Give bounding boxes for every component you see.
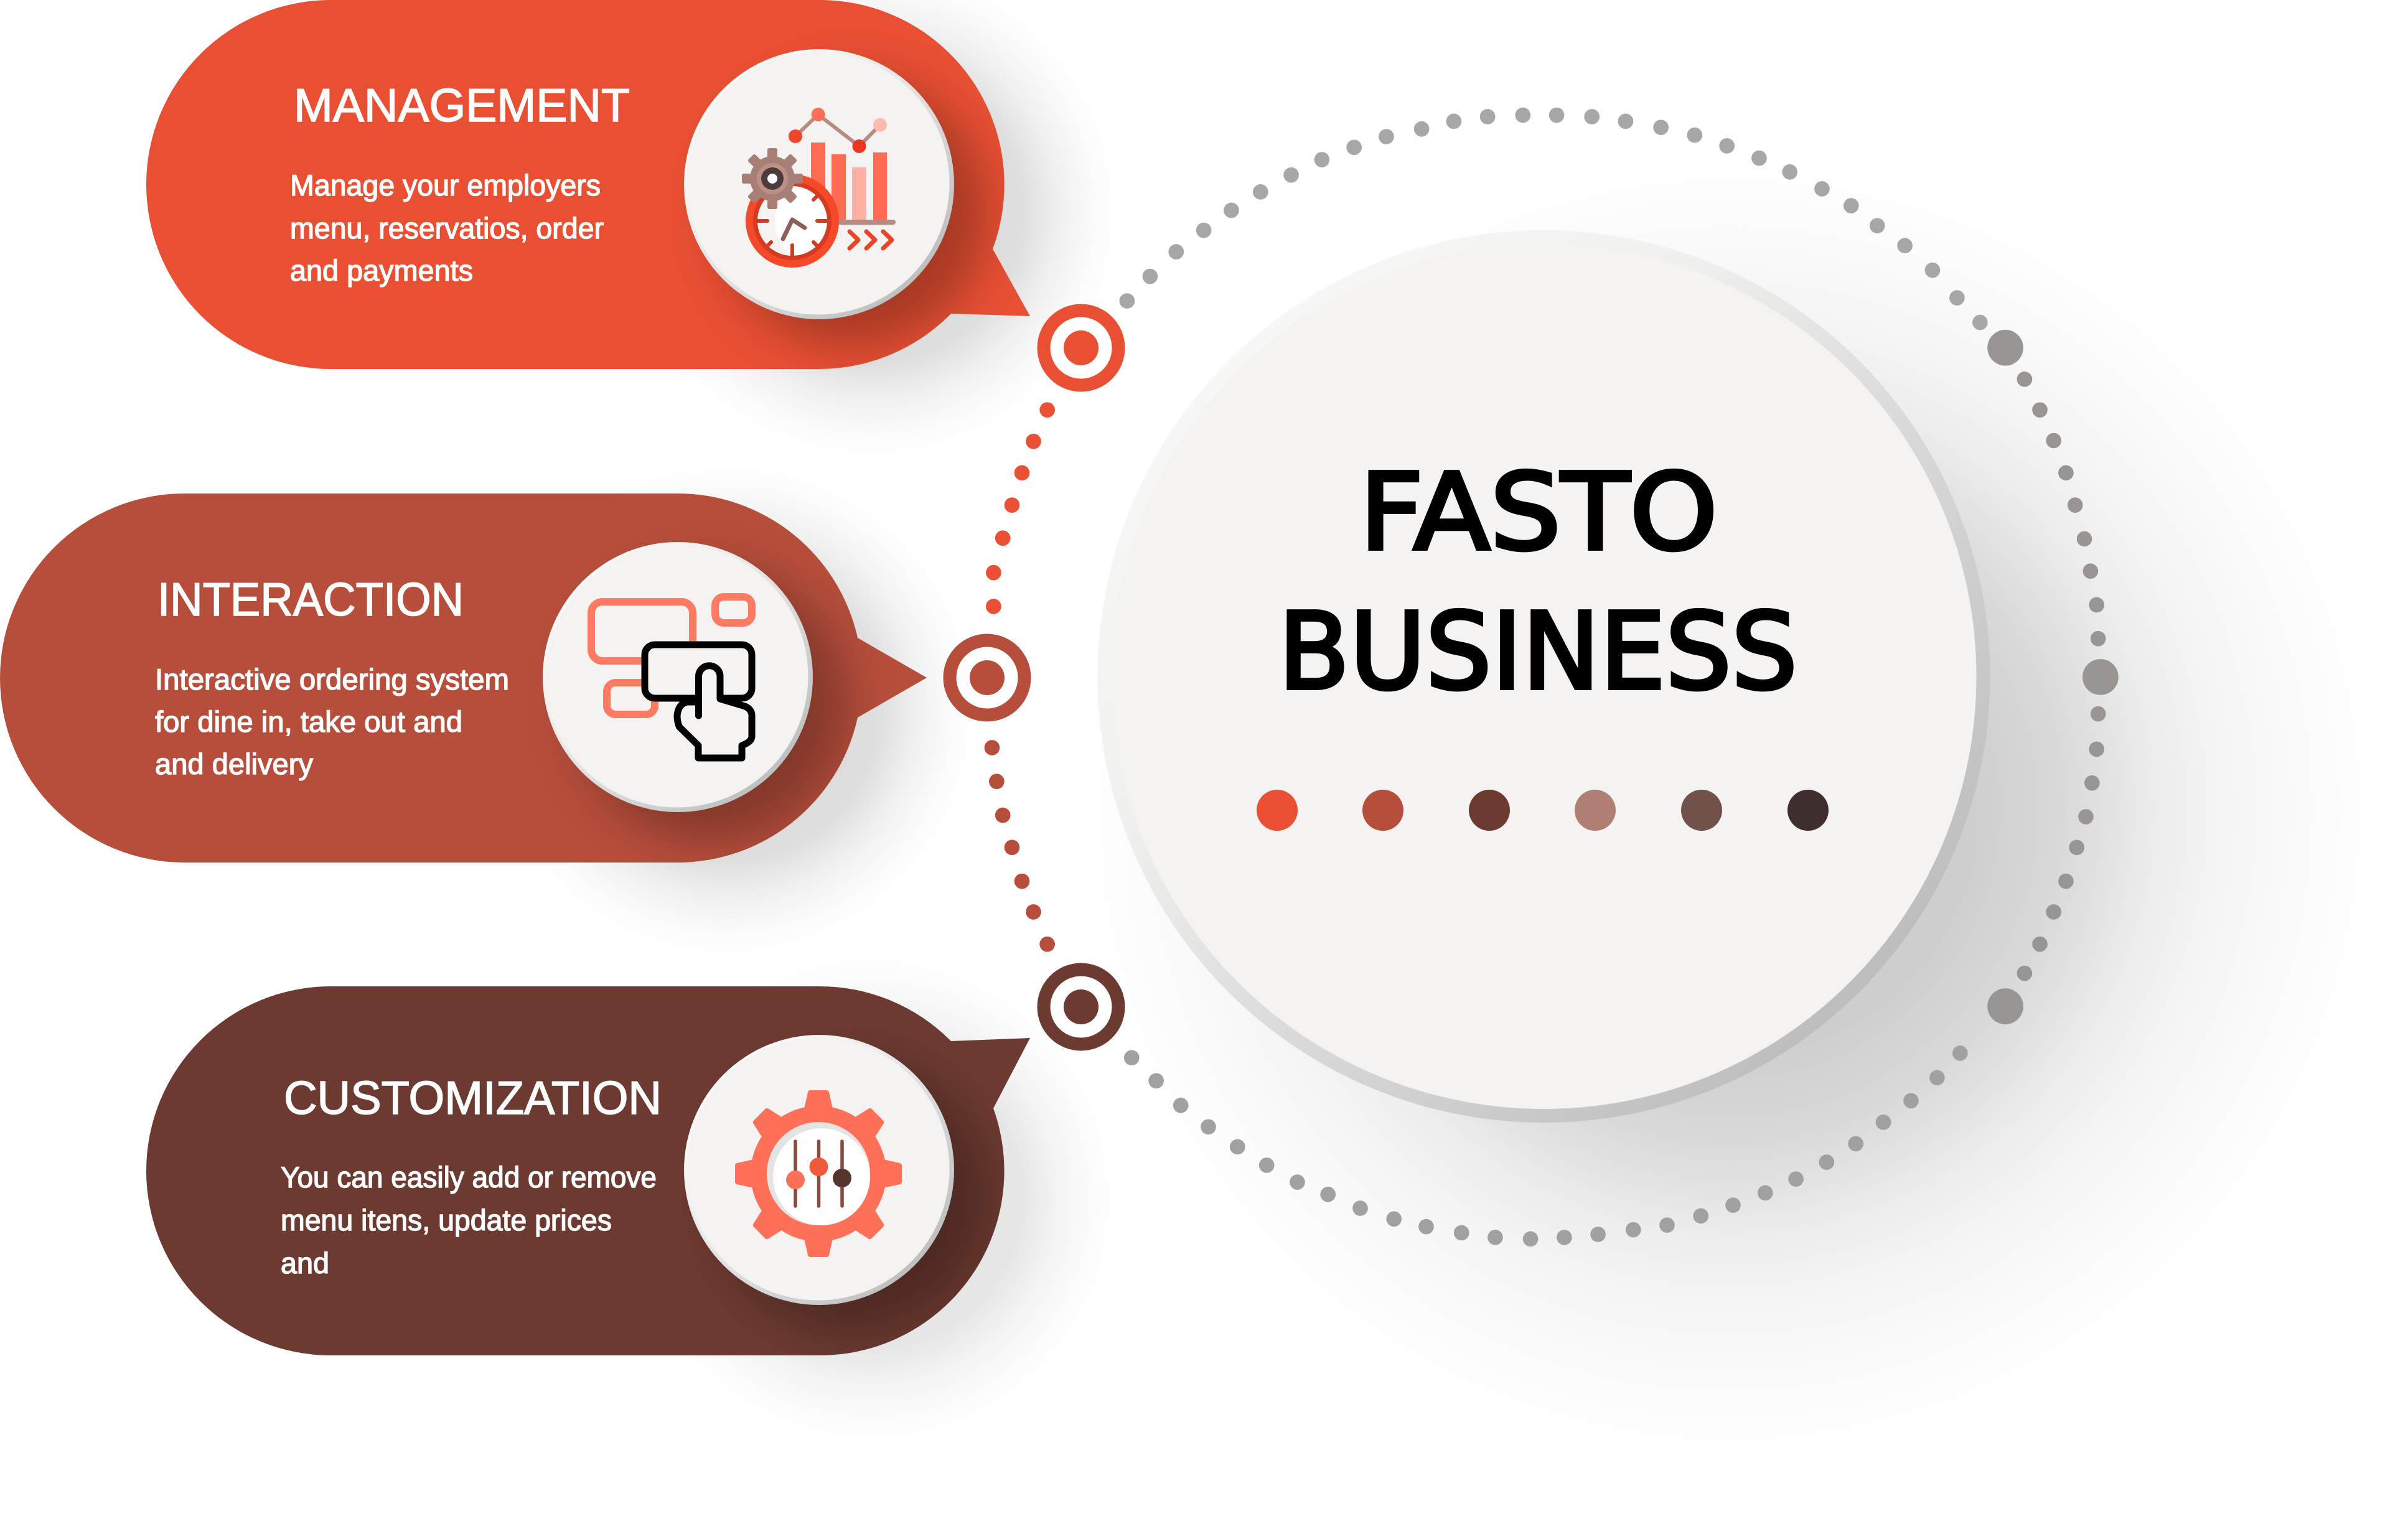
description: Manage your employers	[290, 169, 601, 202]
trend nodes	[789, 108, 887, 153]
speech bubble	[146, 0, 1030, 369]
bar baseline	[822, 220, 896, 225]
row of six color dots	[1257, 790, 1829, 831]
description: Interactive ordering system	[155, 663, 509, 696]
button	[645, 645, 752, 698]
description	[281, 1161, 657, 1279]
title	[1278, 451, 1797, 714]
bars	[811, 143, 887, 223]
drop shadow: interaction card	[479, 461, 977, 958]
drop shadow: management card	[622, 0, 1120, 461]
inner shadow behind badge	[718, 77, 988, 347]
heading: INTERACTION	[157, 573, 464, 625]
icon: finger tapping a button	[591, 597, 752, 758]
description: menu, reservatios, order	[290, 212, 604, 245]
gray dots: upper arc	[1120, 108, 1988, 330]
central circle	[1098, 230, 1990, 1123]
icon: gear with sliders	[735, 1090, 902, 1257]
rust dots: lower left arc	[985, 740, 1055, 952]
description	[290, 169, 604, 287]
inner shadow behind badge	[576, 569, 846, 839]
hand	[677, 666, 752, 758]
dotted orbit ring	[985, 108, 2119, 1246]
panel: management	[146, 0, 1030, 369]
icon: chart, gear and clock	[742, 108, 896, 268]
slider knobs	[786, 1157, 851, 1189]
description	[155, 663, 509, 780]
panel: customization	[146, 986, 1030, 1355]
chevrons	[850, 231, 892, 248]
gear hole	[767, 1122, 870, 1225]
drop shadow: customization card	[622, 950, 1120, 1447]
outline panels	[591, 597, 752, 714]
description: and	[281, 1246, 329, 1279]
slider tracks	[795, 1141, 842, 1206]
circle rim	[1098, 230, 1990, 1123]
badge circle	[684, 1035, 954, 1305]
inner shadow behind badge	[718, 1062, 988, 1332]
description: and delivery	[155, 747, 313, 780]
description: and payments	[290, 254, 473, 287]
title: FASTO	[1359, 451, 1718, 574]
circle face	[1112, 244, 1977, 1109]
panel: interaction	[0, 493, 927, 863]
heading: CUSTOMIZATION	[284, 1072, 662, 1124]
target marker: management	[1037, 304, 1125, 392]
orange dots: upper left arc	[986, 402, 1055, 614]
badge circle	[543, 542, 813, 812]
target marker: customization	[1037, 963, 1125, 1050]
speech bubble	[0, 493, 927, 863]
speech bubble	[146, 986, 1030, 1355]
description: You can easily add or remove	[281, 1161, 657, 1194]
target marker: interaction	[944, 634, 1031, 722]
description: menu itens, update prices	[281, 1204, 612, 1237]
badge circle	[684, 49, 954, 319]
heading: MANAGEMENT	[294, 79, 630, 131]
gear body and teeth	[735, 1090, 902, 1257]
drop shadow: central circle	[1070, 149, 2390, 1469]
gear	[742, 148, 803, 209]
title: BUSINESS	[1278, 591, 1797, 714]
gray dots: lower arc	[1124, 1045, 1968, 1246]
description: for dine in, take out and	[155, 705, 462, 738]
clock	[746, 174, 839, 268]
gray dots: right arc with large nodes	[1987, 330, 2119, 1024]
trend line	[795, 115, 880, 146]
